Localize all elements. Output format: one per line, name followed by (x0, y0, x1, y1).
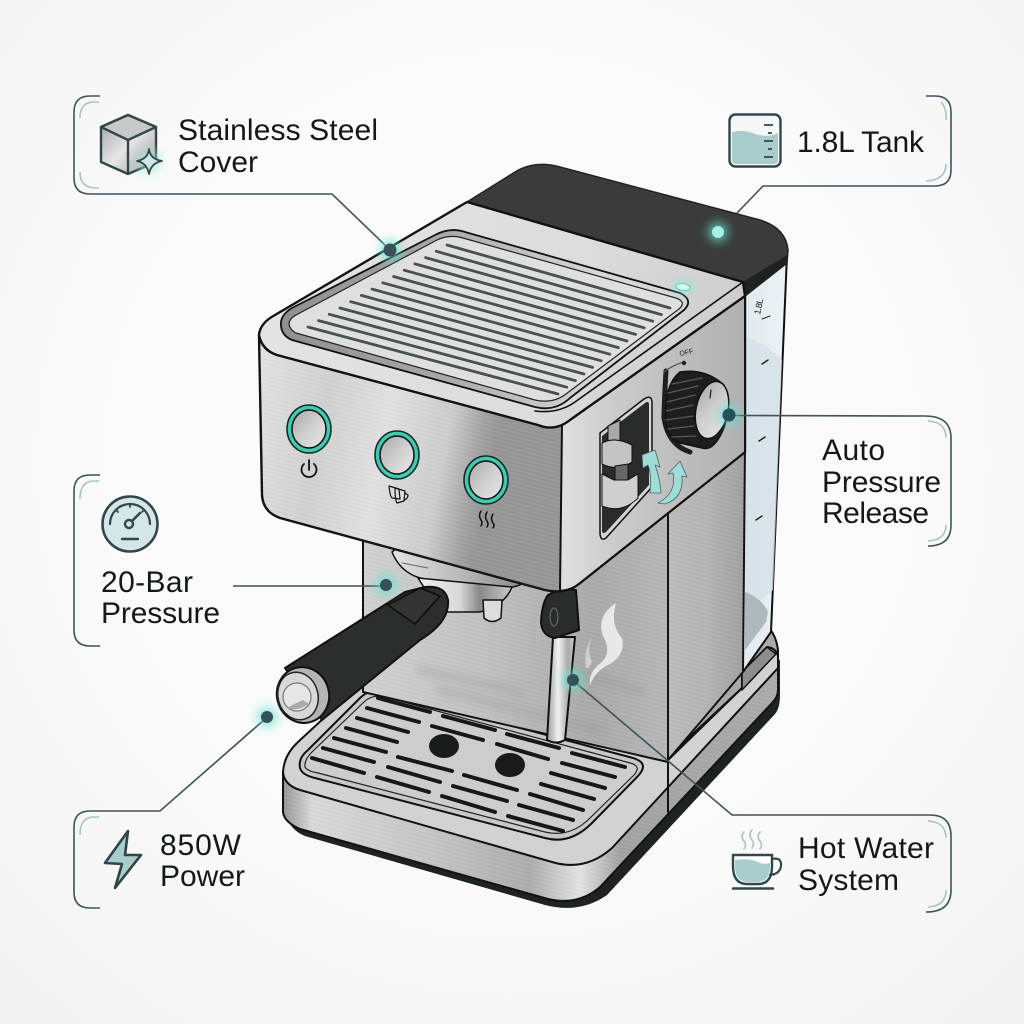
machine head front panel (259, 296, 745, 591)
power button (287, 405, 331, 477)
callout: auto pressure release (734, 416, 951, 546)
marker: hot water (563, 670, 583, 690)
callout: 20-bar pressure (74, 475, 382, 646)
steam wisp (585, 603, 623, 685)
portafilter handle (271, 587, 448, 729)
water tank (743, 255, 787, 672)
base and drip tray (283, 627, 780, 908)
callout: hot water system (576, 683, 951, 912)
rear column and back wall (363, 445, 745, 812)
callout: auto pressure release: Pressure (822, 466, 941, 499)
steam button (464, 456, 508, 528)
boiler window with valve (600, 397, 652, 539)
callout: stainless steel cover (74, 96, 386, 246)
label: 1.8L Tank (797, 126, 925, 159)
callout: 1.8L tank (730, 96, 951, 213)
label: Hot Water (798, 832, 934, 865)
water tank: 1.8L (752, 298, 765, 315)
coffee button (375, 431, 419, 503)
callout: hot water system: System (798, 864, 899, 897)
label: 850W (160, 829, 242, 862)
drip tray slots (312, 698, 625, 831)
callout: stainless steel cover: Cover (178, 146, 258, 179)
status indicator light (672, 280, 694, 294)
marker: tank (708, 222, 728, 242)
steam wand (541, 590, 579, 742)
icon: pressure gauge (102, 496, 158, 552)
top lid, dark (467, 164, 788, 296)
callout: auto pressure release: Release (822, 497, 929, 530)
label: Stainless Steel (178, 114, 378, 147)
marker: 20-bar pressure (376, 575, 396, 595)
control buttons (287, 405, 508, 528)
marker: steel cover (380, 240, 400, 260)
callout: 20-bar pressure: Pressure (101, 597, 220, 630)
callout: 850W power: Power (160, 860, 245, 893)
pressure knob (664, 348, 734, 452)
top plate with ridges (259, 202, 745, 428)
icon: hot cup (733, 830, 781, 888)
pressure release arrows (642, 450, 687, 504)
marker: power (257, 707, 277, 727)
icon: tank gauge (730, 114, 780, 166)
label: Auto (822, 434, 885, 467)
icon: lightning bolt (105, 831, 141, 888)
coffee machine illustration (259, 164, 788, 908)
marker: pressure release (719, 405, 739, 425)
pressure knob: OFF (679, 348, 694, 358)
group head and portafilter (392, 545, 520, 622)
callout: 850W power (74, 720, 264, 908)
label: 20-Bar (101, 566, 193, 599)
icon: steel cube (101, 115, 162, 174)
